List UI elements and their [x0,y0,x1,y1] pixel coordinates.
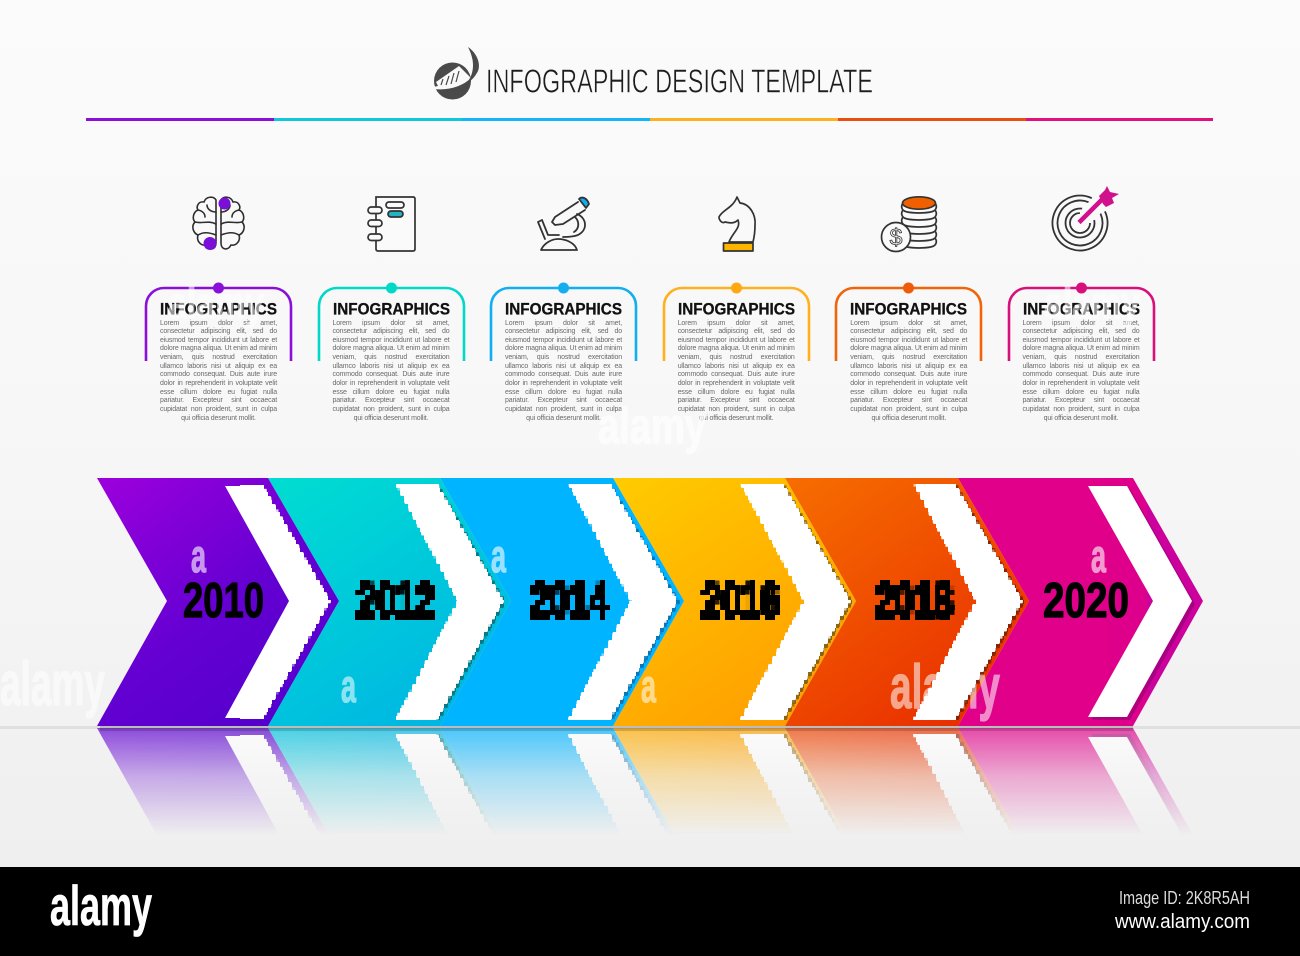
contact shadow under chevrons [100,726,1133,731]
card 2 body text: ullamco laboris nisi ut aliquip ex ea [332,363,450,370]
card 1 body text: dolore magna aliqua. Ut enim ad minim [160,345,277,352]
card 1 body text: Lorem ipsum dolor sit amet, [160,320,277,326]
image id: Image ID: 2K8R5AH [1119,888,1250,908]
card 1 body text: consectetur adipiscing elit, sed do [160,328,277,335]
card 4 body text: veniam, quis nostrud exercitation [678,354,795,361]
card 4 heading: INFOGRAPHICS [678,300,795,318]
card 1 [144,282,292,422]
card 2 [318,282,466,422]
card 2 body text: consectetur adipiscing elit, sed do [332,328,450,335]
year 2010: 2010 [183,574,264,628]
card 6 body text: consectetur adipiscing elit, sed do [1022,328,1140,335]
card 3 body text: commodo consequat. Duis aute irure [505,371,622,378]
card 5 dot [903,282,914,294]
card 1 body text: esse cillum dolore eu fugiat nulla [160,389,277,396]
chevron 2 [268,478,511,726]
year 2016: 2016 [702,574,780,628]
card 4 body text: cupidatat non proident, sunt in culpa [678,406,795,413]
card 2 body text: pariatur. Excepteur sint occaecat [332,397,450,404]
card 3 body text: esse cillum dolore eu fugiat nulla [505,389,622,396]
card 3 body text: cupidatat non proident, sunt in culpa [505,406,622,413]
card 4 body text: Lorem ipsum dolor sit amet, [678,320,795,326]
card 5 body text: commodo consequat. Duis aute irure [850,371,967,378]
card 4 body text: dolore magna aliqua. Ut enim ad minim [678,345,795,352]
card 6 body text: commodo consequat. Duis aute irure [1022,371,1140,378]
card 6 body text: eiusmod tempor incididunt ut labore et [1022,337,1140,344]
card 5 body text: veniam, quis nostrud exercitation [850,354,967,361]
icon: logo [426,47,479,100]
card 2 body text: commodo consequat. Duis aute irure [332,371,450,378]
card 1 body text: dolor in reprehenderit in voluptate velit [160,380,277,387]
card 6 [1008,282,1156,422]
card 6 body text: ullamco laboris nisi ut aliquip ex ea [1022,363,1140,370]
year labels [183,574,1129,628]
card 5 body text: ullamco laboris nisi ut aliquip ex ea [850,363,967,370]
watermarks: alamy [1044,279,1140,328]
card 4 body text: consectetur adipiscing elit, sed do [678,328,795,335]
card 4 body text [678,320,795,422]
chevron 3 [440,478,684,726]
card 1 body text: commodo consequat. Duis aute irure [160,371,277,378]
year 2020: 2020 [1043,574,1129,628]
chevron 6 [958,478,1203,726]
card 3 body text: Lorem ipsum dolor sit amet, [505,320,622,326]
card 6 body text: pariatur. Excepteur sint occaecat [1022,397,1140,404]
card 1 body text: pariatur. Excepteur sint occaecat [160,397,277,404]
card 3 body text [505,320,622,422]
watermarks: a [341,660,356,712]
reflection of chevrons [97,728,1189,828]
icon: coins: $ [890,224,903,250]
watermarks: a [641,660,656,712]
chevron 4 [613,478,856,726]
card 1 body text: ullamco laboris nisi ut aliquip ex ea [160,363,277,370]
icon: coins [882,197,936,252]
card 5 bracket [836,288,981,361]
card 3 body text: qui officia deserunt mollit. [526,415,601,422]
card 6 body text: cupidatat non proident, sunt in culpa [1022,406,1140,413]
card 1 bracket [146,288,291,361]
watermarks: alamy [598,398,706,454]
card 5 body text: Lorem ipsum dolor sit amet, [850,320,967,326]
footer bar [0,867,1300,956]
card 2 body text: qui officia deserunt mollit. [354,415,428,422]
watermarks: alamy [168,279,264,328]
card 5 [834,282,982,422]
card 1 body text [160,320,278,422]
card 3 body text: veniam, quis nostrud exercitation [505,354,622,361]
card 2 body text: dolore magna aliqua. Ut enim ad minim [332,345,450,352]
card 6 body text: Lorem ipsum dolor sit amet, [1022,320,1140,326]
card 5 body text: pariatur. Excepteur sint occaecat [850,397,967,404]
watermarks: a [191,530,206,582]
card 5 body text: dolor in reprehenderit in voluptate velit [850,380,967,387]
card 3 body text: consectetur adipiscing elit, sed do [505,328,622,335]
card 4 dot [731,282,742,294]
card 1 heading: INFOGRAPHICS [160,300,277,318]
card 3 [490,282,638,422]
card 5 body text: consectetur adipiscing elit, sed do [850,328,967,335]
card 6 body text [1022,320,1140,422]
icon: target and dart [1043,186,1119,260]
card 5 body text: dolore magna aliqua. Ut enim ad minim [850,345,967,352]
card 6 bracket [1008,288,1154,361]
icon: brain [193,197,244,250]
card 2 body text: veniam, quis nostrud exercitation [332,354,450,361]
card 3 body text: ullamco laboris nisi ut aliquip ex ea [505,363,622,370]
card 4 body text: eiusmod tempor incididunt ut labore et [678,337,795,344]
year 2018: 2018 [875,574,953,628]
icon: chess knight [719,197,755,251]
title: INFOGRAPHIC DESIGN TEMPLATE [486,62,873,100]
card 3 dot [558,282,569,294]
card 4 body text: commodo consequat. Duis aute irure [678,371,795,378]
card 4 body text: ullamco laboris nisi ut aliquip ex ea [678,363,795,370]
card 1 body text: veniam, quis nostrud exercitation [160,354,277,361]
card 3 heading: INFOGRAPHICS [505,300,622,318]
card 5 body text [850,320,968,422]
ground line [0,726,1300,729]
card 1 body text: eiusmod tempor incididunt ut labore et [160,337,277,344]
card 2 body text: eiusmod tempor incididunt ut labore et [332,337,450,344]
card 5 body text: eiusmod tempor incididunt ut labore et [850,337,967,344]
watermarks: a [1091,530,1106,582]
card 4 bracket [664,288,809,361]
card 3 body text: eiusmod tempor incididunt ut labore et [505,337,622,344]
card 1 body text: cupidatat non proident, sunt in culpa [160,406,277,413]
rainbow rule [86,118,1213,121]
year 2014: 2014 [530,574,608,628]
icon: notebook [368,197,415,251]
card 6 body text: dolor in reprehenderit in voluptate velit [1022,380,1140,387]
card 6 dot [1076,282,1086,294]
card 6 body text: veniam, quis nostrud exercitation [1022,354,1140,361]
card 5 body text: esse cillum dolore eu fugiat nulla [850,389,967,396]
card 2 bracket [318,288,464,361]
header: logo, title and rainbow rule [86,47,1213,121]
card 2 heading: INFOGRAPHICS [332,300,450,318]
card 5 body text: qui officia deserunt mollit. [871,415,946,422]
card 4 [662,282,810,422]
watermarks [0,279,1140,722]
card 2 body text: Lorem ipsum dolor sit amet, [332,320,450,326]
card 2 body text [332,320,450,422]
chevron 1 [97,478,339,726]
site url: www.alamy.com [1114,911,1250,933]
watermarks: alamy [0,650,105,719]
card 2 body text: cupidatat non proident, sunt in culpa [332,406,450,413]
card 2 body text: esse cillum dolore eu fugiat nulla [332,389,450,396]
watermarks: a [491,530,506,582]
card 2 dot [386,282,396,294]
card 4 body text: dolor in reprehenderit in voluptate velit [678,380,795,387]
card 6 body text: esse cillum dolore eu fugiat nulla [1022,389,1140,396]
card 3 body text: pariatur. Excepteur sint occaecat [505,397,622,404]
card 3 body text: dolore magna aliqua. Ut enim ad minim [505,345,622,352]
watermarks: alamy [890,653,1000,722]
card 1 dot [213,282,224,294]
card 6 heading: INFOGRAPHICS [1022,300,1140,318]
chevron 5 [785,478,1029,726]
card 4 body text: pariatur. Excepteur sint occaecat [678,397,795,404]
icon: microscope [538,198,589,250]
card 6 body text: dolore magna aliqua. Ut enim ad minim [1022,345,1140,352]
card 2 body text: dolor in reprehenderit in voluptate velit [332,380,450,387]
chevron arrows [97,478,1203,726]
card 4 body text: esse cillum dolore eu fugiat nulla [678,389,795,396]
card 1 body text: qui officia deserunt mollit. [181,415,256,422]
footer logo: alamy [50,874,152,937]
card 6 body text: qui officia deserunt mollit. [1044,415,1118,422]
card 5 body text: cupidatat non proident, sunt in culpa [850,406,967,413]
icons row [192,186,1119,252]
card 3 body text: dolor in reprehenderit in voluptate velit [505,380,622,387]
card 3 bracket [491,288,636,361]
card 4 body text: qui officia deserunt mollit. [699,415,774,422]
year 2012: 2012 [357,574,435,628]
timeline: chevrons, years and reflection [0,286,1300,828]
card 5 heading: INFOGRAPHICS [850,300,967,318]
